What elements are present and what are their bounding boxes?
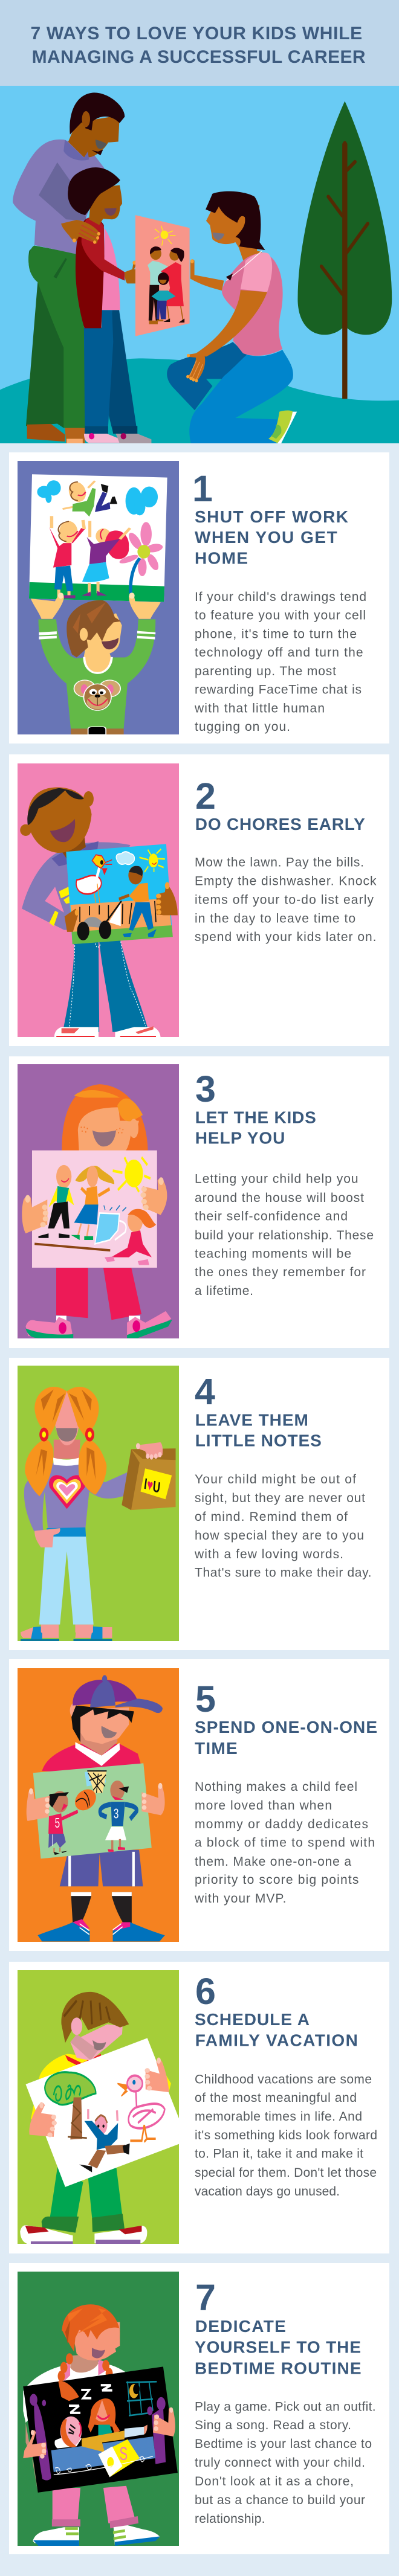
hill (0, 358, 399, 443)
text: tip 6: special for them. Don't let those (195, 2166, 377, 2180)
text: tip 7: BEDTIME ROUTINE (195, 2359, 362, 2377)
hair (25, 1387, 106, 1496)
text: tip 3: around the house will boost (195, 1191, 364, 1205)
drawing: 5 (55, 1816, 60, 1831)
illustration: girl holding bedtime drawing (18, 2272, 179, 2546)
text: tip 2: 2 (195, 776, 216, 817)
text: tip 3: 3 (195, 1068, 216, 1110)
text: tip 2: Mow the lawn. Pay the bills. (195, 855, 364, 870)
drawing (29, 474, 167, 602)
panel: tip 6 (9, 1962, 389, 2253)
drawing (33, 1763, 152, 1858)
text: tip 3: their self-confidence and (195, 1210, 348, 1224)
text: tip 3 (195, 1068, 374, 1298)
text: tip 1: SHUT OFF WORK (195, 507, 348, 526)
monkey sweater patch (74, 680, 120, 711)
text: tip 4: of mind. Remind them of (195, 1510, 348, 1524)
text: tip 7: relationship. (195, 2512, 265, 2526)
text: tip 1: 1 (192, 468, 213, 509)
text: tip 4: 4 (195, 1371, 215, 1412)
text: tip 2 (195, 776, 377, 944)
text: tip 5: Nothing makes a child feel (195, 1780, 357, 1794)
text: tip 1: parenting up. The most (195, 664, 336, 678)
text: tip 7: 7 (195, 2277, 216, 2318)
text: tip 7: Sing a song. Read a story. (195, 2418, 351, 2432)
text: tip 6: it's something kids look forward (195, 2128, 377, 2142)
illustration: boy holding vacation drawing (18, 1970, 179, 2244)
hands (23, 2407, 175, 2459)
text: tip 5: them. Make one-on-one a (195, 1855, 351, 1869)
illustration: red-haired girl holding drawing (18, 1064, 179, 1338)
text: tip 7: truly connect with your child. (195, 2456, 365, 2470)
illustration: boy holding drawing with mower (18, 763, 179, 1037)
panel: tip 2 (9, 754, 389, 1046)
hands (27, 1783, 165, 1821)
text: tip 1: with that little human (194, 702, 325, 715)
illustration: girl with lunch bag (18, 1366, 179, 1641)
text: tip 3: the ones they remember for (195, 1265, 366, 1279)
text: tip 1: technology off and turn the (195, 646, 363, 660)
text: tip 3: LET THE KIDS (195, 1108, 316, 1127)
text: tip 4: LITTLE NOTES (195, 1431, 322, 1450)
text: tip 5: priority to score big points (195, 1873, 358, 1887)
text: tip 2: in the day to leave time to (195, 912, 355, 926)
head (20, 788, 94, 853)
header band with title (0, 0, 399, 86)
text: tip 5: a block of time to spend with (195, 1836, 375, 1850)
illustration: boy in cap with basketball drawing (18, 1668, 179, 1942)
text: tip 5: SPEND ONE-ON-ONE (195, 1718, 377, 1736)
hands (29, 2057, 169, 2137)
text: tip 2: items off your to-do list early (195, 893, 374, 907)
header band with title: 7 WAYS TO LOVE YOUR KIDS WHILE (30, 24, 362, 43)
text: tip 3: teaching moments will be (195, 1247, 351, 1261)
girl (25, 1084, 172, 1338)
illustration: boy holding drawing overhead (18, 461, 179, 734)
text: tip 7: but as a chance to build your (195, 2493, 365, 2507)
bedtime drawing (23, 2366, 178, 2493)
hands (65, 883, 178, 932)
text: tip 6: FAMILY VACATION (195, 2031, 358, 2050)
lunch bag with note (122, 1442, 176, 1510)
text: tip 5 (194, 1678, 377, 1906)
drawing (32, 1151, 157, 1268)
child's drawing of a family (135, 215, 190, 336)
text: tip 7: Play a game. Pick out an outfit. (195, 2400, 376, 2414)
father (13, 92, 125, 443)
text: tip 3: Letting your child help you (195, 1172, 358, 1186)
text: tip 5: mommy or daddy dedicates (195, 1817, 368, 1831)
text: tip 1: If your child's drawings tend (195, 590, 366, 604)
hands (22, 1177, 167, 1233)
text: tip 6: of the most meaningful and (195, 2091, 357, 2105)
boy (20, 1991, 171, 2244)
drawing (66, 844, 173, 944)
boy (22, 837, 161, 1037)
header band with title: MANAGING A SUCCESSFUL CAREER (32, 47, 366, 67)
lunch bag with note: I♥U (143, 1474, 161, 1497)
text: tip 3: a lifetime. (195, 1284, 253, 1298)
panel: tip 5 (9, 1659, 389, 1951)
text: tip 5: more loved than when (195, 1799, 332, 1813)
panel: tip 7 (9, 2263, 389, 2554)
father's hand on shoulder (61, 220, 100, 244)
text: tip 7 (195, 2277, 376, 2526)
text: tip 5: with your MVP. (194, 1892, 287, 1906)
bedtime drawing: S (119, 2443, 128, 2464)
text: tip 4: how special they are to you (195, 1529, 364, 1543)
text: tip 3: HELP YOU (195, 1128, 285, 1148)
text: tip 7: YOURSELF TO THE (195, 2337, 361, 2357)
text: tip 2: DO CHORES EARLY (195, 815, 365, 834)
panel: tip 4 (9, 1358, 389, 1650)
text: tip 6: memorable times in life. And (195, 2110, 362, 2124)
text: tip 6 (195, 1971, 377, 2199)
text: tip 6: vacation days go unused. (195, 2185, 340, 2199)
text: tip 2: spend with your kids later on. (195, 930, 376, 944)
boy (31, 593, 161, 734)
girl (21, 1439, 128, 1641)
text: tip 1: to feature you with your cell (195, 609, 366, 623)
text: tip 1: phone, it's time to turn the (195, 627, 357, 641)
boy (68, 167, 151, 443)
text: tip 6: Childhood vacations are some (195, 2073, 372, 2087)
text: tip 1: tugging on you. (195, 720, 290, 734)
text: tip 6: SCHEDULE A (195, 2010, 310, 2029)
text: tip 5: 5 (195, 1678, 216, 1720)
text: tip 1: HOME (195, 548, 248, 568)
text: tip 2: Empty the dishwasher. Knock (195, 875, 377, 888)
drawing: 3 (114, 1806, 118, 1822)
hero illustration: family looking at a child's drawing (0, 86, 399, 443)
text: tip 4 (194, 1371, 371, 1580)
text: tip 1 (192, 468, 366, 734)
text: tip 4: with a few loving words. (194, 1547, 343, 1561)
panel: tip 3 (9, 1056, 389, 1348)
text: tip 4: LEAVE THEM (195, 1411, 308, 1429)
mother (167, 191, 297, 443)
tree (297, 101, 392, 399)
text: tip 4: That's sure to make their day. (195, 1566, 371, 1580)
girl (23, 2304, 160, 2546)
boy (37, 1701, 165, 1941)
text: tip 1: WHEN YOU GET (195, 528, 337, 547)
panel: tip 1 (9, 452, 389, 744)
text: tip 6: 6 (195, 1971, 216, 2012)
drawing (25, 2038, 179, 2186)
text: tip 7: Bedtime is your last chance to (195, 2437, 372, 2451)
text: tip 4: sight, but they are never out (195, 1491, 365, 1505)
cap (73, 1675, 163, 1713)
text: tip 4: Your child might be out of (195, 1473, 356, 1486)
text: tip 1: rewarding FaceTime chat is (195, 683, 362, 697)
text: tip 7: DEDICATE (195, 2317, 286, 2336)
text: tip 5: TIME (195, 1739, 238, 1758)
text: tip 3: build your relationship. These (195, 1229, 374, 1242)
text: tip 7: Don't look at it as a chore, (195, 2475, 354, 2488)
text: tip 6: to. Plan it, take it and make it (195, 2147, 363, 2161)
